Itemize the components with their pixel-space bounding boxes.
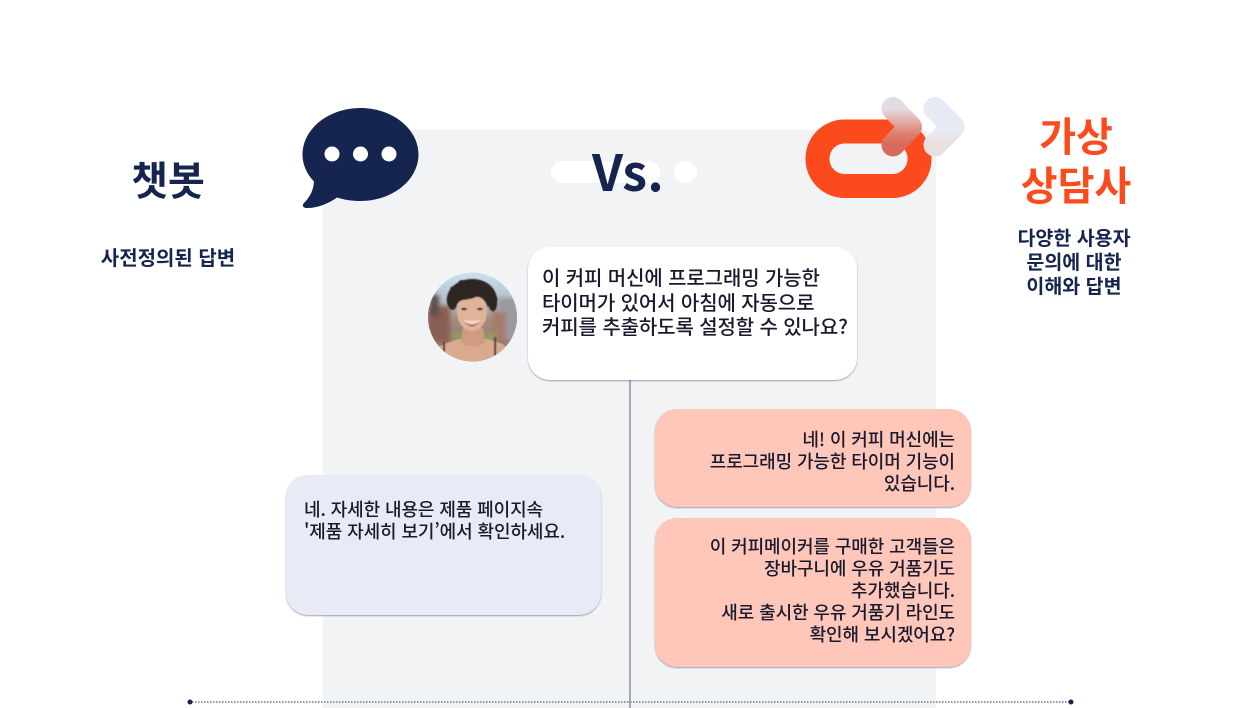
text: agent answer two (710, 533, 955, 647)
text: virtual agent description (1017, 222, 1131, 299)
text: virtual agent description: 문의에 대한 (1026, 246, 1122, 275)
text: agent answer one (710, 426, 955, 496)
text: agent answer two: 이 커피메이커를 구매한 고객들은 (710, 533, 955, 559)
decoration: white dot behind Vs (674, 161, 697, 183)
text: chatbot answer (304, 496, 565, 544)
decoration: white pill behind Vs (551, 161, 660, 183)
icon: virtual agent link with chevrons (806, 97, 964, 198)
text: customer question: 타이머가 있어서 아침에 자동으로 (542, 286, 814, 316)
icon: customer portrait photo (428, 272, 517, 362)
heading: virtual agent: 상담사 (1021, 154, 1131, 212)
divider: dotted baseline with end points (188, 700, 1074, 704)
heading: Vs.: Vs. (592, 134, 664, 206)
divider: vertical center line (629, 378, 631, 708)
heading: virtual agent (1021, 105, 1131, 212)
icon: chatbot speech bubble (302, 108, 418, 208)
panel: agent answer bubble one (655, 409, 971, 507)
text: chatbot answer: 네. 자세한 내용은 제품 페이지속 (304, 496, 543, 522)
panel: background comparison card (323, 130, 936, 708)
panel: agent answer bubble two (655, 518, 971, 667)
heading: chatbot: 챗봇 (131, 149, 205, 207)
text: agent answer one: 프로그래밍 가능한 타이머 기능이 (710, 448, 955, 474)
text: virtual agent description: 다양한 사용자 (1017, 222, 1131, 251)
heading: virtual agent: 가상 (1039, 105, 1113, 163)
text: agent answer two: 새로 출시한 우유 거품기 라인도 (721, 599, 955, 625)
text: virtual agent description: 이해와 답변 (1026, 270, 1122, 299)
text: agent answer two: 확인해 보시겠어요? (810, 621, 955, 647)
text: agent answer one: 네! 이 커피 머신에는 (802, 426, 955, 452)
panel: chatbot answer bubble (286, 475, 601, 615)
panel: customer question bubble (528, 247, 857, 380)
text: agent answer two: 장바구니에 우유 거품기도 (764, 555, 955, 581)
text: chatbot answer: '제품 자세히 보기’에서 확인하세요. (304, 518, 565, 544)
text: agent answer one: 있습니다. (884, 470, 955, 496)
text: customer question: 이 커피 머신에 프로그래밍 가능한 (542, 262, 820, 291)
text: customer question: 커피를 추출하도록 설정할 수 있나요? (542, 311, 848, 340)
text: customer question (542, 262, 848, 340)
text: chatbot description: 사전정의된 답변 (101, 242, 235, 271)
text: agent answer two: 추가했습니다. (851, 577, 955, 603)
